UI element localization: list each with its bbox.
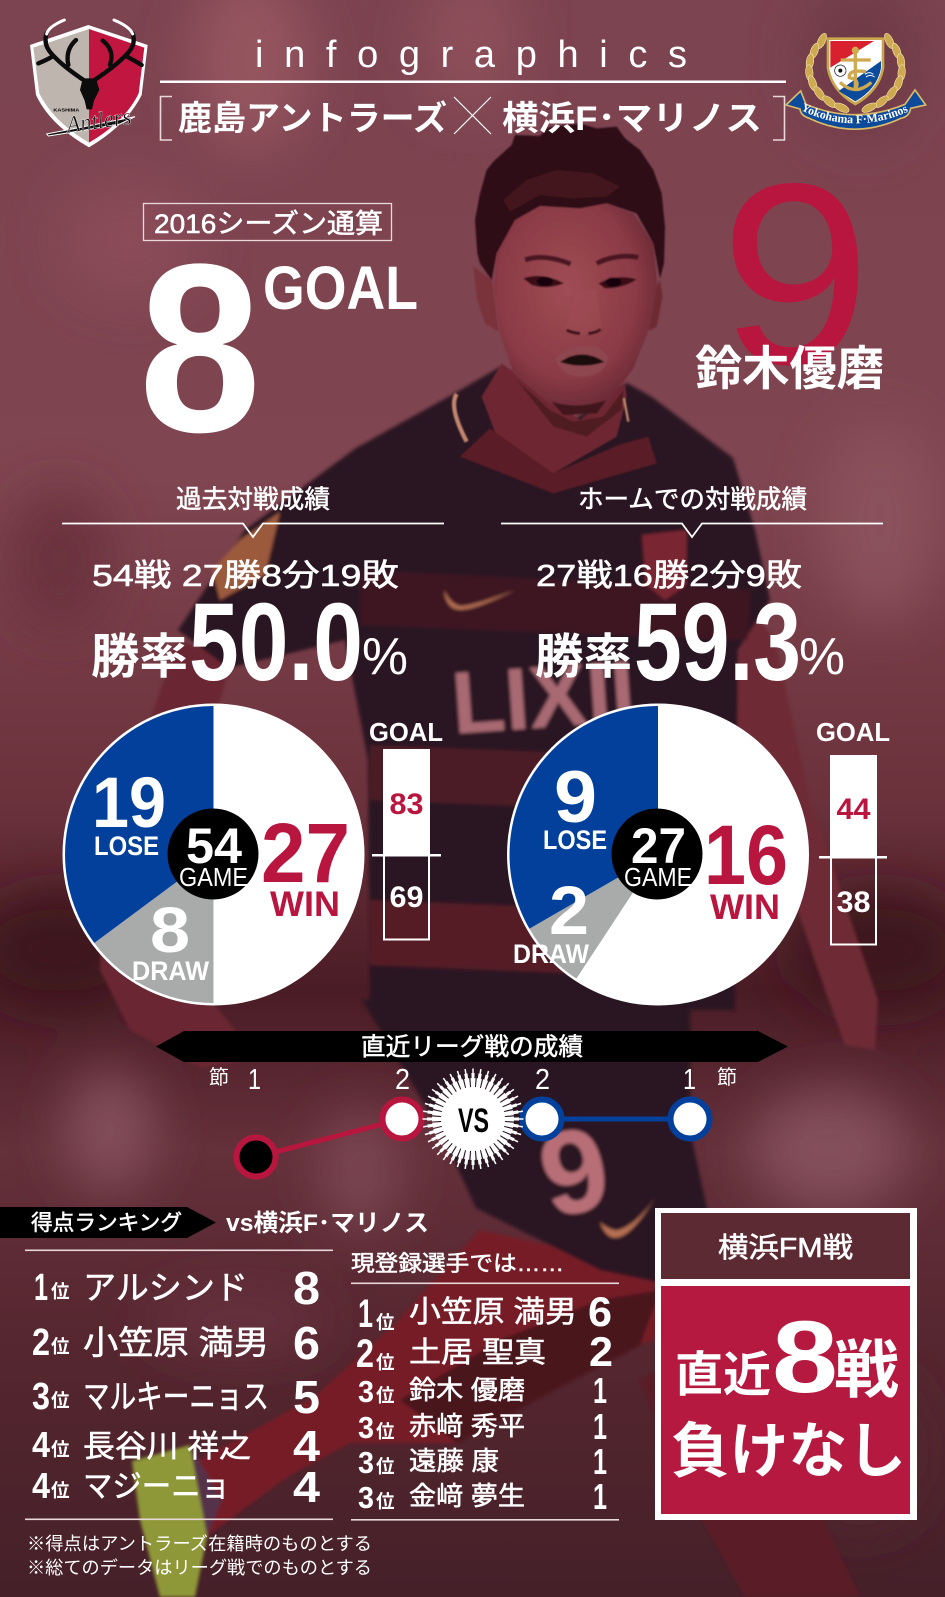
ranking rows: 2 [32, 1322, 50, 1364]
pointer rule [501, 524, 883, 537]
jersey logo [444, 590, 516, 610]
shorts number: 9 [528, 1101, 620, 1244]
squad rows: 1 [593, 1476, 607, 1517]
pie chart [62, 704, 364, 1006]
squad rows: 位 [376, 1352, 395, 1373]
footnotes: ※総てのデータはリーグ戦でのものとする [27, 1558, 372, 1578]
heading: infographics: infographics [255, 34, 687, 76]
squad rows: 金﨑 夢生 [409, 1481, 525, 1511]
logo: Kashima Antlers: Antlers [63, 104, 133, 139]
mouth [555, 346, 608, 377]
pie chart: LOSE [94, 831, 159, 861]
win rate [91, 581, 408, 704]
squad rows: 6 [588, 1288, 612, 1335]
logo wordmark: KASHIMA [53, 107, 80, 113]
panel: current squad ranking [351, 1251, 619, 1521]
ranking rows: 3 [32, 1376, 50, 1418]
pie chart: 2 [549, 872, 589, 949]
antlers [38, 33, 142, 82]
record text: 54戦 27勝8分19敗 [92, 558, 399, 593]
shorts [362, 1000, 716, 1285]
goal count: 8 [139, 214, 261, 482]
pie chart: DRAW [132, 956, 209, 986]
pie chart [507, 704, 809, 1006]
callout: unbeaten streak: 8 [772, 1300, 838, 1414]
win rate [535, 581, 845, 704]
chest panel [460, 428, 657, 493]
heading: match-up: 鹿島アントラーズ [178, 99, 447, 138]
squad rows [356, 1288, 613, 1517]
squad rows: 位 [376, 1312, 395, 1333]
squad rows: 1 [593, 1441, 607, 1482]
photo: player [100, 123, 878, 1597]
wreath [805, 32, 850, 114]
Marinos results line [522, 1100, 710, 1138]
goal bar: GOAL [816, 717, 890, 747]
squad rows: 鈴木 優磨 [409, 1375, 525, 1405]
shorts logo [600, 1196, 656, 1238]
goal bar [369, 717, 443, 940]
pie chart: 8 [150, 894, 190, 966]
ranking rows: マルキーニョス [83, 1378, 269, 1415]
panel: all-time record [62, 486, 444, 1006]
pointer rule [62, 524, 444, 537]
ears [473, 267, 498, 332]
logo: Kashima Antlers [30, 20, 148, 147]
rules [25, 1250, 333, 1251]
record text: 27戦16勝2分9敗 [536, 558, 802, 593]
matchday labels: 2 [395, 1064, 410, 1096]
win rate: % [362, 628, 408, 686]
matchday labels: 2 [535, 1064, 550, 1096]
subheading: 現登録選手では…… [351, 1251, 564, 1276]
callout heading: 横浜FM戦 [718, 1232, 853, 1263]
win rate: 50.0 [189, 581, 363, 704]
collar [454, 394, 467, 442]
ranking rows [32, 1262, 321, 1512]
squad rows: 小笠原 満男 [409, 1296, 577, 1329]
footnotes [27, 1534, 372, 1578]
right leg [640, 1340, 860, 1597]
ranking rows: 4 [293, 1422, 321, 1471]
ranking rows: 4 [32, 1465, 50, 1506]
win rate: 59.3 [634, 581, 801, 704]
eyes [523, 276, 564, 287]
banner: 直近リーグ戦の成績 [361, 1033, 583, 1061]
squad rows: 3 [358, 1410, 374, 1445]
sleeve patch [212, 512, 280, 600]
pie chart: 27 [631, 818, 686, 874]
ranking rows: アルシンド [83, 1269, 248, 1306]
VS burst [425, 1071, 521, 1167]
goal bar: GOAL [369, 717, 443, 747]
matchday labels [209, 1064, 737, 1096]
hair [475, 123, 665, 280]
win rate: % [799, 628, 845, 686]
callout text: 直近 [675, 1349, 771, 1402]
skull [80, 78, 99, 109]
pie chart: LOSE [543, 825, 607, 855]
pie chart: 9 [554, 757, 597, 838]
squad rows: 2 [589, 1328, 613, 1375]
face [493, 203, 657, 415]
heading: match-up [160, 96, 784, 140]
ranking rows: マジーニョ [83, 1469, 230, 1504]
waves [865, 73, 875, 77]
matchday labels: 節 [717, 1066, 737, 1089]
squad rows: 3 [358, 1374, 374, 1409]
panel: scoring ranking [0, 1207, 429, 1520]
squad rows: 2 [356, 1332, 374, 1376]
footnotes: ※得点はアントラーズ在籍時のものとする [27, 1534, 372, 1554]
ball [835, 65, 846, 76]
logo wordmark: Yokohama F·Marinos [802, 103, 908, 124]
goal bar: 44 [836, 793, 871, 826]
club crest on jersey [642, 530, 687, 600]
ranking rows: 1 [34, 1267, 48, 1309]
head [454, 123, 665, 493]
ranking rows: 位 [51, 1439, 70, 1460]
squad rows: 位 [376, 1491, 395, 1512]
squad rows: 1 [593, 1370, 607, 1411]
squad rows: 3 [358, 1445, 374, 1480]
ranking rows: 小笠原 満男 [83, 1324, 269, 1361]
goal count: GOAL [263, 254, 418, 322]
callout: unbeaten streak: 戦 [834, 1336, 899, 1406]
squad rows: 3 [358, 1480, 374, 1515]
neck [482, 363, 627, 473]
jersey number: 9 [720, 129, 871, 418]
ranking rows: 位 [51, 1281, 70, 1302]
pie chart: 19 [92, 764, 166, 843]
pie chart: GAME [624, 862, 692, 892]
section heading: ホームでの対戦成績 [578, 486, 807, 514]
squad rows: 赤﨑 秀平 [409, 1411, 525, 1441]
right arm [735, 600, 878, 1050]
pie chart: 27 [261, 806, 350, 900]
squad rows: 遠藤 康 [409, 1446, 499, 1476]
logo: Yokohama F. Marinos [784, 33, 927, 130]
Antlers results line [236, 1100, 422, 1176]
shield [827, 37, 884, 106]
jersey stripes [360, 570, 750, 640]
ranking rows: 8 [293, 1262, 320, 1314]
squad rows: 1 [593, 1406, 607, 1447]
squad rows: 位 [376, 1385, 395, 1406]
jersey [178, 367, 770, 1010]
ranking rows: 位 [51, 1480, 70, 1501]
ranking rows: 位 [51, 1336, 70, 1357]
ranking rows: 長谷川 祥之 [83, 1429, 251, 1464]
tag [0, 1207, 216, 1238]
goal count [139, 214, 418, 482]
pie chart: DRAW [513, 939, 589, 969]
ribbon [786, 90, 926, 129]
goal bar: 83 [390, 788, 424, 821]
matchday labels: 節 [209, 1066, 229, 1089]
player name: 鈴木優磨 [695, 342, 884, 395]
panel: recent league results [156, 1031, 788, 1176]
win rate: 勝率 [535, 631, 632, 684]
goal bar [816, 717, 890, 944]
callout: unbeaten streak [655, 1208, 917, 1520]
pie chart: 16 [704, 808, 788, 902]
section heading: 過去対戦成績 [176, 486, 330, 514]
boot [132, 1445, 207, 1597]
matchday labels: 1 [683, 1064, 696, 1096]
anchor [840, 51, 871, 89]
left arm [100, 640, 240, 1068]
pie chart: GAME [179, 862, 248, 892]
rule under heading [160, 80, 786, 83]
panel: home record [501, 486, 890, 1006]
squad rows: 位 [376, 1421, 395, 1442]
eyebrows [525, 256, 638, 264]
ranking rows: 位 [51, 1390, 70, 1411]
season label: 2016シーズン通算 [154, 209, 383, 239]
ranking rows: 5 [293, 1371, 320, 1423]
jersey sponsor: LIXIL [449, 639, 667, 753]
pie chart: 54 [186, 818, 242, 874]
squad rows: 位 [376, 1456, 395, 1477]
banner [156, 1031, 788, 1062]
matchday labels: 1 [248, 1064, 261, 1096]
ranking rows: 6 [293, 1317, 320, 1369]
squad rows: 土居 聖真 [409, 1336, 546, 1369]
pie chart: WIN [270, 885, 340, 924]
goal bar: 69 [390, 881, 424, 914]
heading: match-up: 横浜F･マリノス [502, 100, 762, 138]
beard shadow [552, 400, 607, 415]
callout: unbeaten streak: 負けなし [671, 1418, 906, 1485]
subtitle: vs横浜F･マリノス [226, 1210, 429, 1237]
nose [565, 290, 602, 335]
tag: 得点ランキング [31, 1211, 182, 1235]
goal bar: 38 [836, 886, 870, 919]
ranking rows: 4 [32, 1424, 50, 1465]
pie chart: WIN [710, 888, 780, 927]
VS burst: VS [458, 1102, 489, 1140]
ranking rows: 4 [293, 1463, 321, 1512]
win rate: 勝率 [91, 631, 188, 684]
left leg [182, 1230, 716, 1536]
squad rows: 1 [358, 1292, 373, 1336]
